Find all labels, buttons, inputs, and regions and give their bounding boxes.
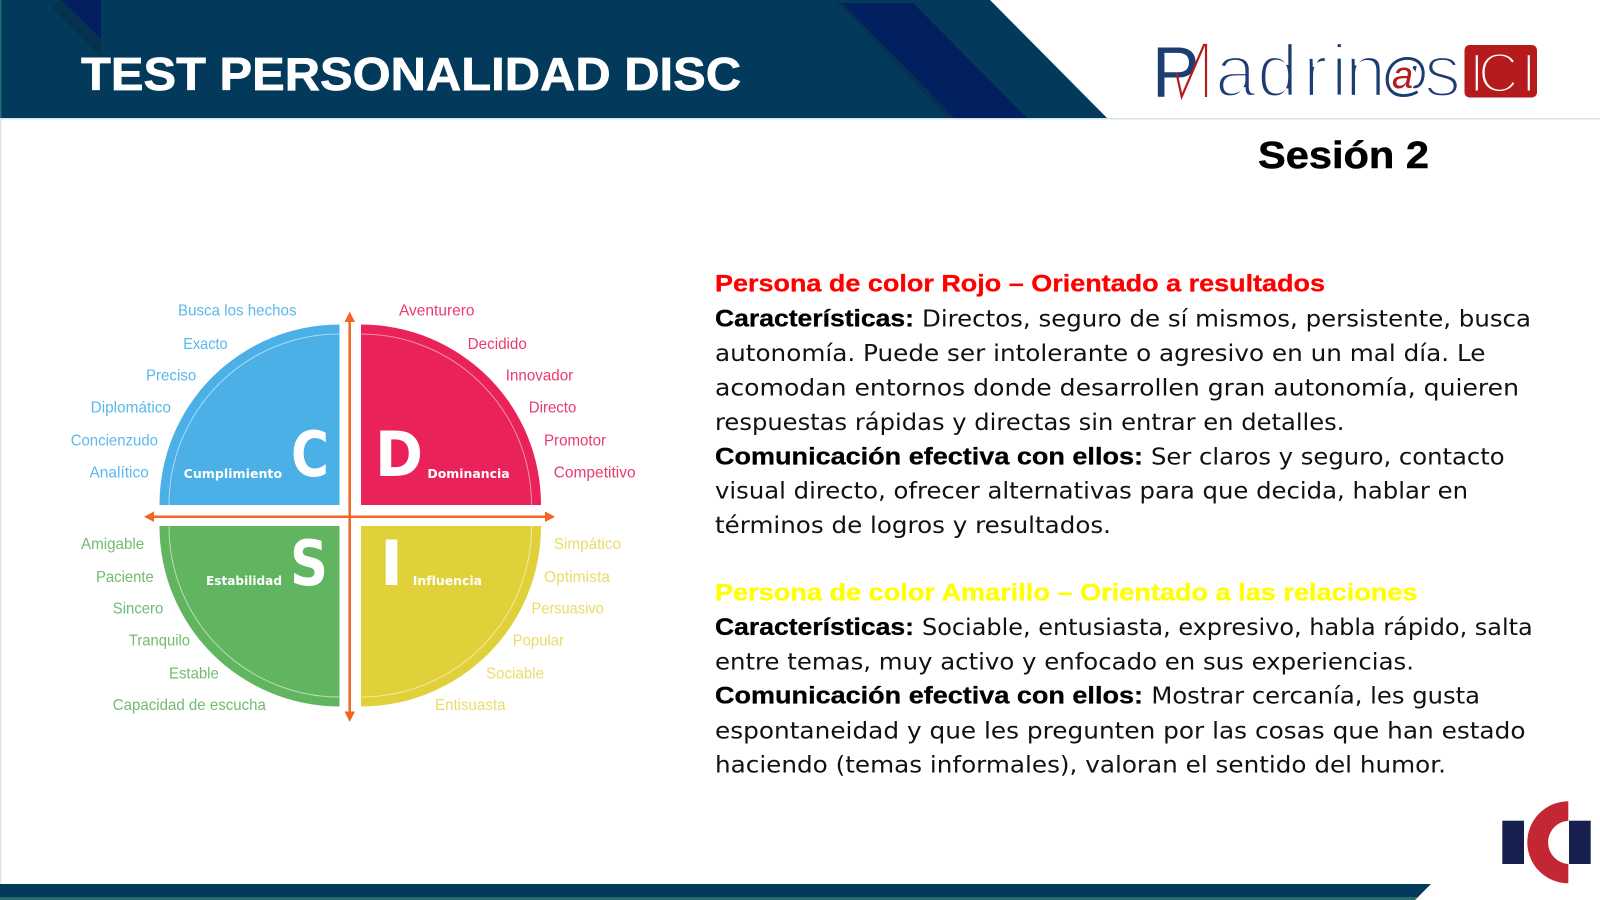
- quadrant C: Cumplimiento: [159, 324, 340, 505]
- traits I: Optimista: [544, 569, 610, 586]
- traits C: Concienzudo: [71, 433, 158, 450]
- traits C: Exacto: [183, 336, 228, 353]
- text block: persona roja: [715, 271, 1531, 539]
- paragraph: rojo características: [715, 306, 1531, 436]
- traits S: Tranquilo: [129, 633, 190, 650]
- traits C: Analítico: [90, 464, 149, 481]
- paragraph: rojo características: acomodan entornos donde desarrollen gran autonomía, quieren: [715, 376, 1519, 402]
- traits D: Directo: [529, 399, 576, 416]
- DISC diagram: [71, 303, 636, 722]
- quadrant S: Estabilidad: S: [290, 527, 328, 600]
- header band: [0, 0, 1600, 120]
- paragraph: amarillo características: Sociable, entusiasta, expresivo, habla rápido, salta: [922, 615, 1533, 641]
- traits C: Busca los hechos: [178, 303, 296, 320]
- paragraph: rojo comunicación: Ser claros y seguro, contacto: [1151, 444, 1505, 470]
- heading: amarillo: Persona de color Amarillo – Orientado a las relaciones: [715, 580, 1418, 607]
- traits D: Aventurero: [399, 303, 475, 320]
- logo: Madrin@s ICI: [1152, 30, 1537, 113]
- paragraph: rojo características: Directos, seguro de sí mismos, persistente, busca: [922, 306, 1531, 332]
- text block: persona amarilla: [715, 580, 1533, 779]
- logo: Madrin@s ICI: adrins: [1215, 30, 1461, 113]
- paragraph: amarillo características: entre temas, muy activo y enfocado en sus experiencias.: [715, 649, 1414, 675]
- quadrant I: Influencia: [361, 526, 541, 706]
- traits S: Amigable: [81, 536, 144, 553]
- traits C: [71, 303, 296, 481]
- paragraph: amarillo características: [715, 614, 1533, 675]
- paragraph: rojo comunicación: Comunicación efectiva con ellos:: [715, 444, 1143, 470]
- quadrant D: Dominancia: Dominancia: [427, 467, 510, 481]
- paragraph: amarillo comunicación: haciendo (temas informales), valoran el sentido del humor.: [715, 753, 1446, 779]
- quadrant S: Estabilidad: [159, 526, 340, 706]
- traits D: Innovador: [506, 368, 574, 385]
- paragraph: rojo comunicación: [715, 444, 1505, 539]
- paragraph: amarillo comunicación: Mostrar cercanía, les gusta: [1151, 683, 1480, 709]
- heading: rojo: Persona de color Rojo – Orientado a resultados: [715, 271, 1325, 298]
- session label: Sesión 2: [1258, 135, 1429, 177]
- traits I: Simpático: [554, 536, 621, 553]
- paragraph: rojo características: autonomía. Puede ser intolerante o agresivo en un mal día. Le: [715, 341, 1486, 367]
- paragraph: rojo características: Características:: [715, 306, 914, 332]
- quadrant C: Cumplimiento: Cumplimiento: [184, 467, 282, 481]
- quadrant D: Dominancia: D: [375, 418, 423, 491]
- footer band: [0, 884, 1431, 900]
- traits D: Decidido: [468, 336, 527, 353]
- traits D: Promotor: [544, 433, 607, 450]
- logo: Madrin@s ICI: @: [1382, 48, 1429, 100]
- traits S: Paciente: [96, 569, 154, 586]
- logo: Madrin@s ICI: ICI: [1469, 41, 1537, 104]
- title: TEST PERSONALIDAD DISC: [81, 48, 741, 100]
- traits C: Diplomático: [91, 399, 171, 416]
- traits I: Sociable: [486, 666, 544, 682]
- quadrant I: Influencia: I: [380, 527, 403, 600]
- paragraph: rojo características: respuestas rápidas y directas sin entrar en detalles.: [715, 410, 1344, 436]
- traits I: [435, 536, 621, 714]
- traits D: Competitivo: [554, 464, 636, 481]
- logo: Madrin@s ICI: P: [1152, 34, 1199, 113]
- quadrant I: Influencia: Influencia: [413, 574, 482, 588]
- traits S: [81, 536, 266, 714]
- paragraph: amarillo comunicación: Comunicación efectiva con ellos:: [715, 682, 1143, 709]
- paragraph: amarillo características: Características:: [715, 614, 914, 641]
- quadrant C: Cumplimiento: C: [291, 418, 329, 491]
- logo: Madrin@s ICI: a: [1392, 55, 1413, 97]
- quadrant S: Estabilidad: Estabilidad: [206, 574, 282, 588]
- paragraph: amarillo comunicación: [715, 682, 1526, 779]
- paragraph: rojo comunicación: términos de logros y resultados.: [715, 513, 1111, 539]
- quadrant D: Dominancia: [361, 324, 541, 505]
- traits C: Preciso: [146, 368, 196, 385]
- paragraph: rojo comunicación: visual directo, ofrecer alternativas para que decida, hablar en: [715, 478, 1468, 504]
- icon: ICI mark: [1502, 801, 1591, 883]
- traits I: Entisuasta: [435, 697, 506, 714]
- axis arrows: [144, 312, 555, 722]
- traits S: Capacidad de escucha: [113, 697, 266, 714]
- traits I: Popular: [513, 633, 565, 650]
- traits D: [399, 303, 636, 481]
- paragraph: amarillo comunicación: espontaneidad y que les pregunten por las cosas que han estado: [715, 718, 1526, 744]
- traits S: Estable: [169, 666, 219, 682]
- traits I: Persuasivo: [532, 600, 604, 618]
- traits S: Sincero: [113, 600, 163, 618]
